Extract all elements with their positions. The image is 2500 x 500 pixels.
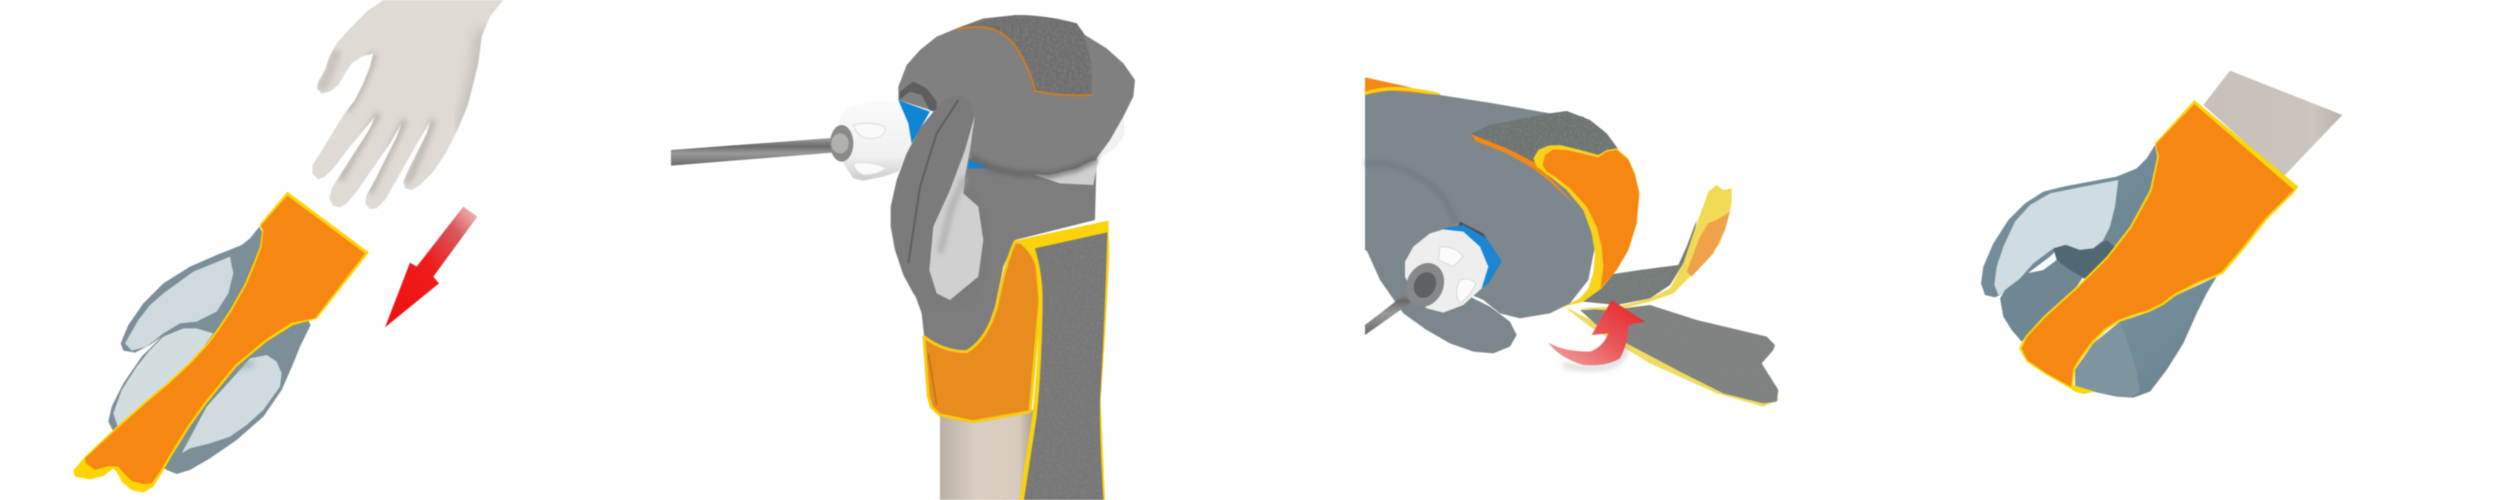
knob and shaft bbox=[1365, 222, 1502, 335]
glove neck bbox=[913, 157, 1098, 352]
knob bbox=[830, 100, 930, 181]
hand bbox=[310, 0, 507, 213]
panel: step 4, glove fastened on arm bbox=[1981, 71, 2342, 398]
lower strap bbox=[1563, 305, 1778, 407]
glove head bbox=[898, 15, 1135, 175]
upper strap tail bbox=[1577, 185, 1732, 311]
shaft bbox=[671, 138, 833, 166]
glove: orange strap with yellow edge bbox=[73, 192, 369, 493]
arm bbox=[940, 410, 1033, 500]
orange cuff with yellow edge bbox=[924, 242, 1040, 422]
glove body bbox=[1365, 91, 1617, 318]
arrow: curved red bbox=[1548, 300, 1645, 368]
white knob behind head bbox=[1083, 113, 1125, 163]
panel: step 1, hand entering glove bbox=[73, 0, 507, 493]
arm bbox=[2203, 71, 2342, 177]
glove: grey mitt bbox=[108, 227, 311, 474]
arrow: red down-left bbox=[385, 207, 477, 327]
velcro patch on head bbox=[957, 15, 1092, 95]
thumb flap bbox=[891, 95, 992, 312]
velcro patch bbox=[1471, 111, 1618, 207]
velcro strap bbox=[1015, 221, 1109, 500]
cuff top bbox=[1365, 77, 1440, 95]
mitt: upper thumb bbox=[1981, 145, 2157, 297]
panel: step 2, glove on arm with velcro strap bbox=[671, 15, 1135, 500]
orange strap with yellow edge bbox=[2019, 100, 2298, 394]
grey thumb lower bbox=[1365, 217, 1517, 353]
panel: step 3, strap being wrapped bbox=[1365, 77, 1778, 407]
mitt: palm bbox=[2000, 240, 2217, 398]
orange flap bbox=[1533, 145, 1639, 307]
